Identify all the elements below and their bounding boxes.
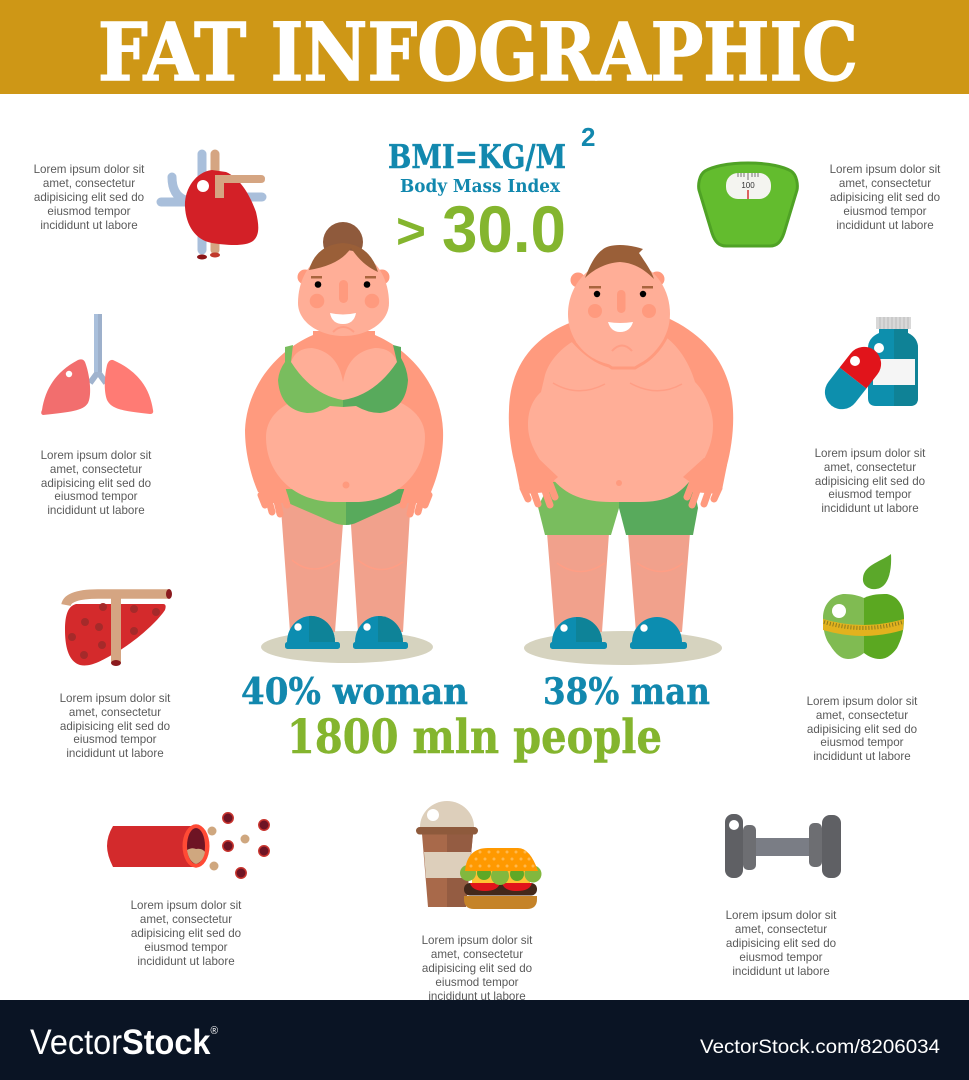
text: liver: adipisicing elit sed do [60,720,170,733]
chest [290,348,400,405]
text: apple: eiusmod tempor [820,736,904,749]
text: medicine: eiusmod tempor [828,488,912,501]
torso and arms [245,331,443,495]
text: heart [34,163,145,232]
icon: medicine [818,317,918,416]
text: liver [60,692,171,760]
text: artery: Lorem ipsum dolor sit [131,899,242,912]
man statistic: 38% man [543,671,710,713]
icon: liver [65,589,172,666]
hands [515,457,727,494]
text: heart: incididunt ut labore [40,219,138,232]
footer bar [0,1000,969,1080]
icon: heart [161,154,265,260]
belly [266,392,425,502]
text: scale: incididunt ut labore [836,219,934,232]
BMI formula heading: BMI=KG/M [388,137,566,176]
woman statistic: 40% woman [241,671,468,713]
floor shadow [261,631,433,663]
text: medicine [815,447,926,515]
text: food: adipisicing elit sed do [422,962,532,975]
total statistic: 1800 mln people [287,710,662,765]
text: artery: eiusmod tempor [144,941,228,954]
text: artery: incididunt ut labore [137,955,235,968]
text: food: Lorem ipsum dolor sit [422,934,533,947]
burger [464,896,537,909]
text: scale: adipisicing elit sed do [830,191,940,204]
text: lungs [41,449,152,517]
text: apple [807,695,918,763]
text: heart: Lorem ipsum dolor sit [34,163,145,176]
text: medicine: adipisicing elit sed do [815,475,925,488]
text: food: eiusmod tempor [435,976,519,989]
title banner: FAT INFOGRAPHIC [98,5,858,99]
text: scale [830,163,941,232]
text: apple: adipisicing elit sed do [807,723,917,736]
figure: man [509,245,733,665]
text: apple: Lorem ipsum dolor sit [807,695,918,708]
shoes [287,616,335,642]
text: apple: incididunt ut labore [813,750,911,763]
body mass index subtitle: Body Mass Index [400,177,561,197]
text: lungs: adipisicing elit sed do [41,477,151,490]
text: dumbbell: adipisicing elit sed do [726,937,836,950]
text: scale: Lorem ipsum dolor sit [830,163,941,176]
text: liver: eiusmod tempor [73,733,157,746]
text: heart: eiusmod tempor [47,205,131,218]
text: lungs: eiusmod tempor [54,490,138,503]
torso and arms [509,318,733,492]
footer bar: VectorStock [30,1023,217,1062]
icon: dumbbell [725,814,841,878]
text: food: amet, consectetur [431,948,523,961]
icon: apple with measuring tape [823,554,904,659]
text: artery [131,899,242,968]
text: medicine: amet, consectetur [824,461,916,474]
text: scale: eiusmod tempor [843,205,927,218]
BMI threshold: 30.0 [442,192,566,266]
text: liver: amet, consectetur [69,706,161,719]
icon: coffee and burger [416,801,542,909]
text: food: incididunt ut labore [428,990,526,1003]
text: artery: adipisicing elit sed do [131,927,241,940]
text: heart: amet, consectetur [43,177,135,190]
text: medicine: Lorem ipsum dolor sit [815,447,926,460]
head [323,222,363,262]
figure: woman [245,222,443,663]
text: heart: adipisicing elit sed do [34,191,144,204]
text: liver: incididunt ut labore [66,747,164,760]
text: dumbbell: eiusmod tempor [739,951,823,964]
bikini top [278,345,343,413]
text: dumbbell: incididunt ut labore [732,965,830,978]
text: dumbbell [726,909,837,978]
text: lungs: amet, consectetur [50,463,142,476]
text: food [422,934,533,1003]
head [570,272,586,288]
icon: scale [699,163,797,246]
footer bar: VectorStock.com/8206034 [700,1037,940,1058]
text: dumbbell: Lorem ipsum dolor sit [726,909,837,922]
text: liver: Lorem ipsum dolor sit [60,692,171,705]
bikini bottom [285,489,346,525]
shorts [538,478,619,535]
BMI formula heading: 2 [581,122,595,152]
legs [280,495,411,632]
floor shadow [524,631,722,665]
icon: lungs [41,314,153,415]
text: dumbbell: amet, consectetur [735,923,827,936]
text: scale: amet, consectetur [839,177,931,190]
icon: scale: 100 [741,181,755,190]
belly [528,338,713,502]
text: artery: amet, consectetur [140,913,232,926]
text: apple: amet, consectetur [816,709,908,722]
footer bar: ® [210,1025,218,1037]
BMI threshold: > [396,203,426,259]
text: lungs: incididunt ut labore [47,504,145,517]
shoes [552,617,602,642]
hands [256,480,434,503]
icon: clogged artery [107,813,269,878]
legs [547,533,690,632]
text: lungs: Lorem ipsum dolor sit [41,449,152,462]
neck shadow [572,336,667,368]
text: medicine: incididunt ut labore [821,502,919,515]
